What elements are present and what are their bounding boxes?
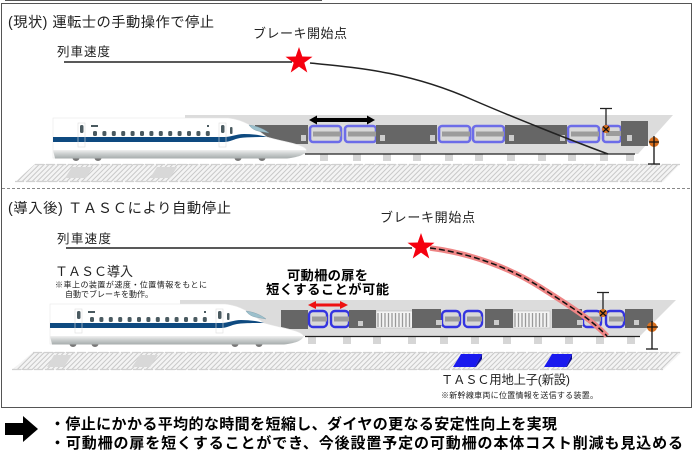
label: ground coil: ※新幹線車両に位置情報を送信する装置。 (441, 390, 598, 400)
train (53, 118, 306, 161)
stop marker: door (600, 108, 612, 133)
platform (185, 115, 673, 154)
conclusion text (50, 415, 683, 450)
platform edge line (305, 336, 640, 338)
label: brake start point: ブレーキ開始点 (380, 210, 475, 225)
icon: brake star (286, 47, 312, 72)
conclusion text: ・停止にかかる平均的な時間を短縮し、ダイヤの更なる安定性向上を実現 (50, 415, 557, 433)
heading: after: (導入後) ＴＡＳＣにより自動停止 (8, 200, 231, 217)
label: ground coil: ＴＡＳＣ用地上子(新設) (441, 373, 570, 387)
new speed curve (430, 248, 607, 336)
icon: conclusion arrow (5, 416, 38, 442)
door width arrow (309, 116, 375, 124)
stop marker: car end (648, 136, 660, 164)
track (12, 352, 682, 370)
label: TASC introduced: ＴＡＳＣ導入 (55, 264, 133, 279)
platform gates with long doors (255, 121, 648, 146)
label: TASC introduced: 自動でブレーキを動作。 (65, 289, 153, 299)
panel: after TASC (8, 200, 682, 400)
label: TASC introduced: ※車上の装置が速度・位置情報をもとに (55, 280, 207, 290)
panel: current manual stop (8, 14, 680, 182)
door width arrow (308, 301, 348, 309)
speed line (66, 247, 412, 249)
stop marker: door (597, 292, 609, 317)
heading: current: (現状) 運転士の手動操作で停止 (8, 14, 214, 31)
icon: ground coils (453, 354, 572, 367)
label: train speed: 列車速度 (57, 44, 110, 59)
platform gates with short doors (281, 309, 653, 329)
callout: shorter doors: 短くすることが可能 (266, 281, 389, 297)
track (15, 164, 680, 182)
stop marker: car end (646, 321, 658, 349)
label: train speed: 列車速度 (57, 231, 111, 246)
label: TASC introduced (55, 264, 207, 299)
platform edge line (305, 153, 635, 155)
speed curve (64, 62, 608, 154)
callout: shorter doors (266, 267, 389, 297)
train (50, 304, 303, 347)
callout: shorter doors: 可動柵の扉を (287, 267, 368, 283)
label: ground coil (441, 373, 598, 400)
platform supports (320, 154, 634, 161)
platform (180, 300, 676, 336)
icon: brake star (408, 233, 434, 258)
label: brake start point: ブレーキ開始点 (253, 26, 347, 41)
platform supports (308, 337, 635, 344)
